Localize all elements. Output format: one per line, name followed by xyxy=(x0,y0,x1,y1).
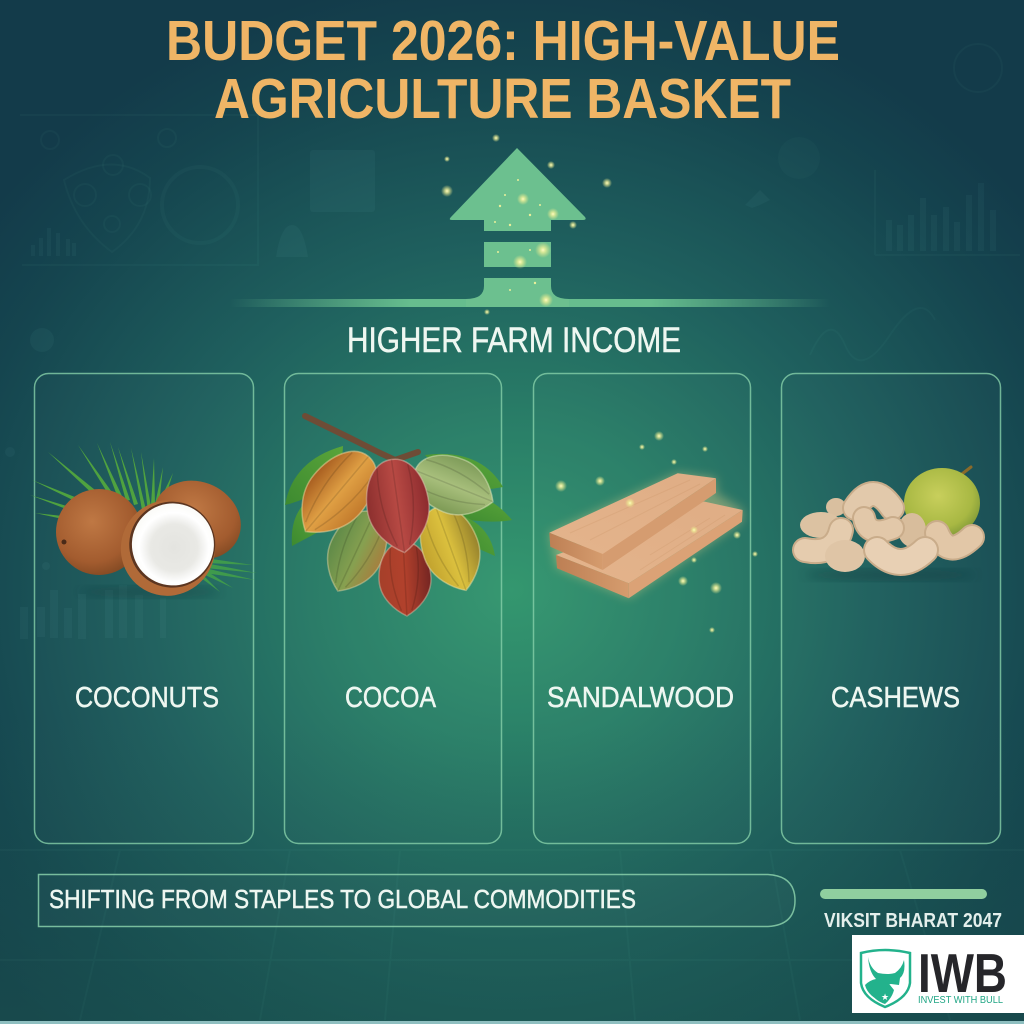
label: coconuts: COCONUTS xyxy=(75,682,219,714)
icon: sandalwood planks xyxy=(549,431,758,633)
tagline: INVEST WITH BULL xyxy=(918,995,1003,1006)
panel: coconuts xyxy=(30,374,257,844)
icon: cashews and apple xyxy=(800,467,980,581)
bottom strip xyxy=(0,1021,1024,1024)
icon: coconuts xyxy=(30,442,257,611)
panel: sandalwood xyxy=(534,374,758,844)
title xyxy=(166,9,840,131)
banner: shifting from staples xyxy=(38,874,795,926)
banner: shifting from staples: SHIFTING FROM STAPLES TO GLOBAL COMMODITIES xyxy=(49,884,636,914)
icon: cocoa pods xyxy=(283,416,512,617)
panel: cocoa xyxy=(283,374,512,844)
label: cocoa: COCOA xyxy=(345,682,437,714)
progress bar xyxy=(820,889,987,899)
logo: IWB xyxy=(852,935,1024,1013)
title: AGRICULTURE BASKET xyxy=(214,67,791,131)
label: viksit bharat 2047: VIKSIT BHARAT 2047 xyxy=(824,910,1002,932)
title: BUDGET 2026: HIGH-VALUE xyxy=(166,9,840,73)
heading: higher farm income: HIGHER FARM INCOME xyxy=(347,321,681,360)
icon: bull shield xyxy=(861,950,910,1007)
label: cashews: CASHEWS xyxy=(831,682,960,714)
label: sandalwood: SANDALWOOD xyxy=(547,682,734,714)
wordmark: IWB xyxy=(918,942,1007,1004)
panel: cashews xyxy=(782,374,1000,844)
icon: rising arrow with baseline xyxy=(230,134,830,315)
icon: star: ★ xyxy=(881,992,889,1002)
